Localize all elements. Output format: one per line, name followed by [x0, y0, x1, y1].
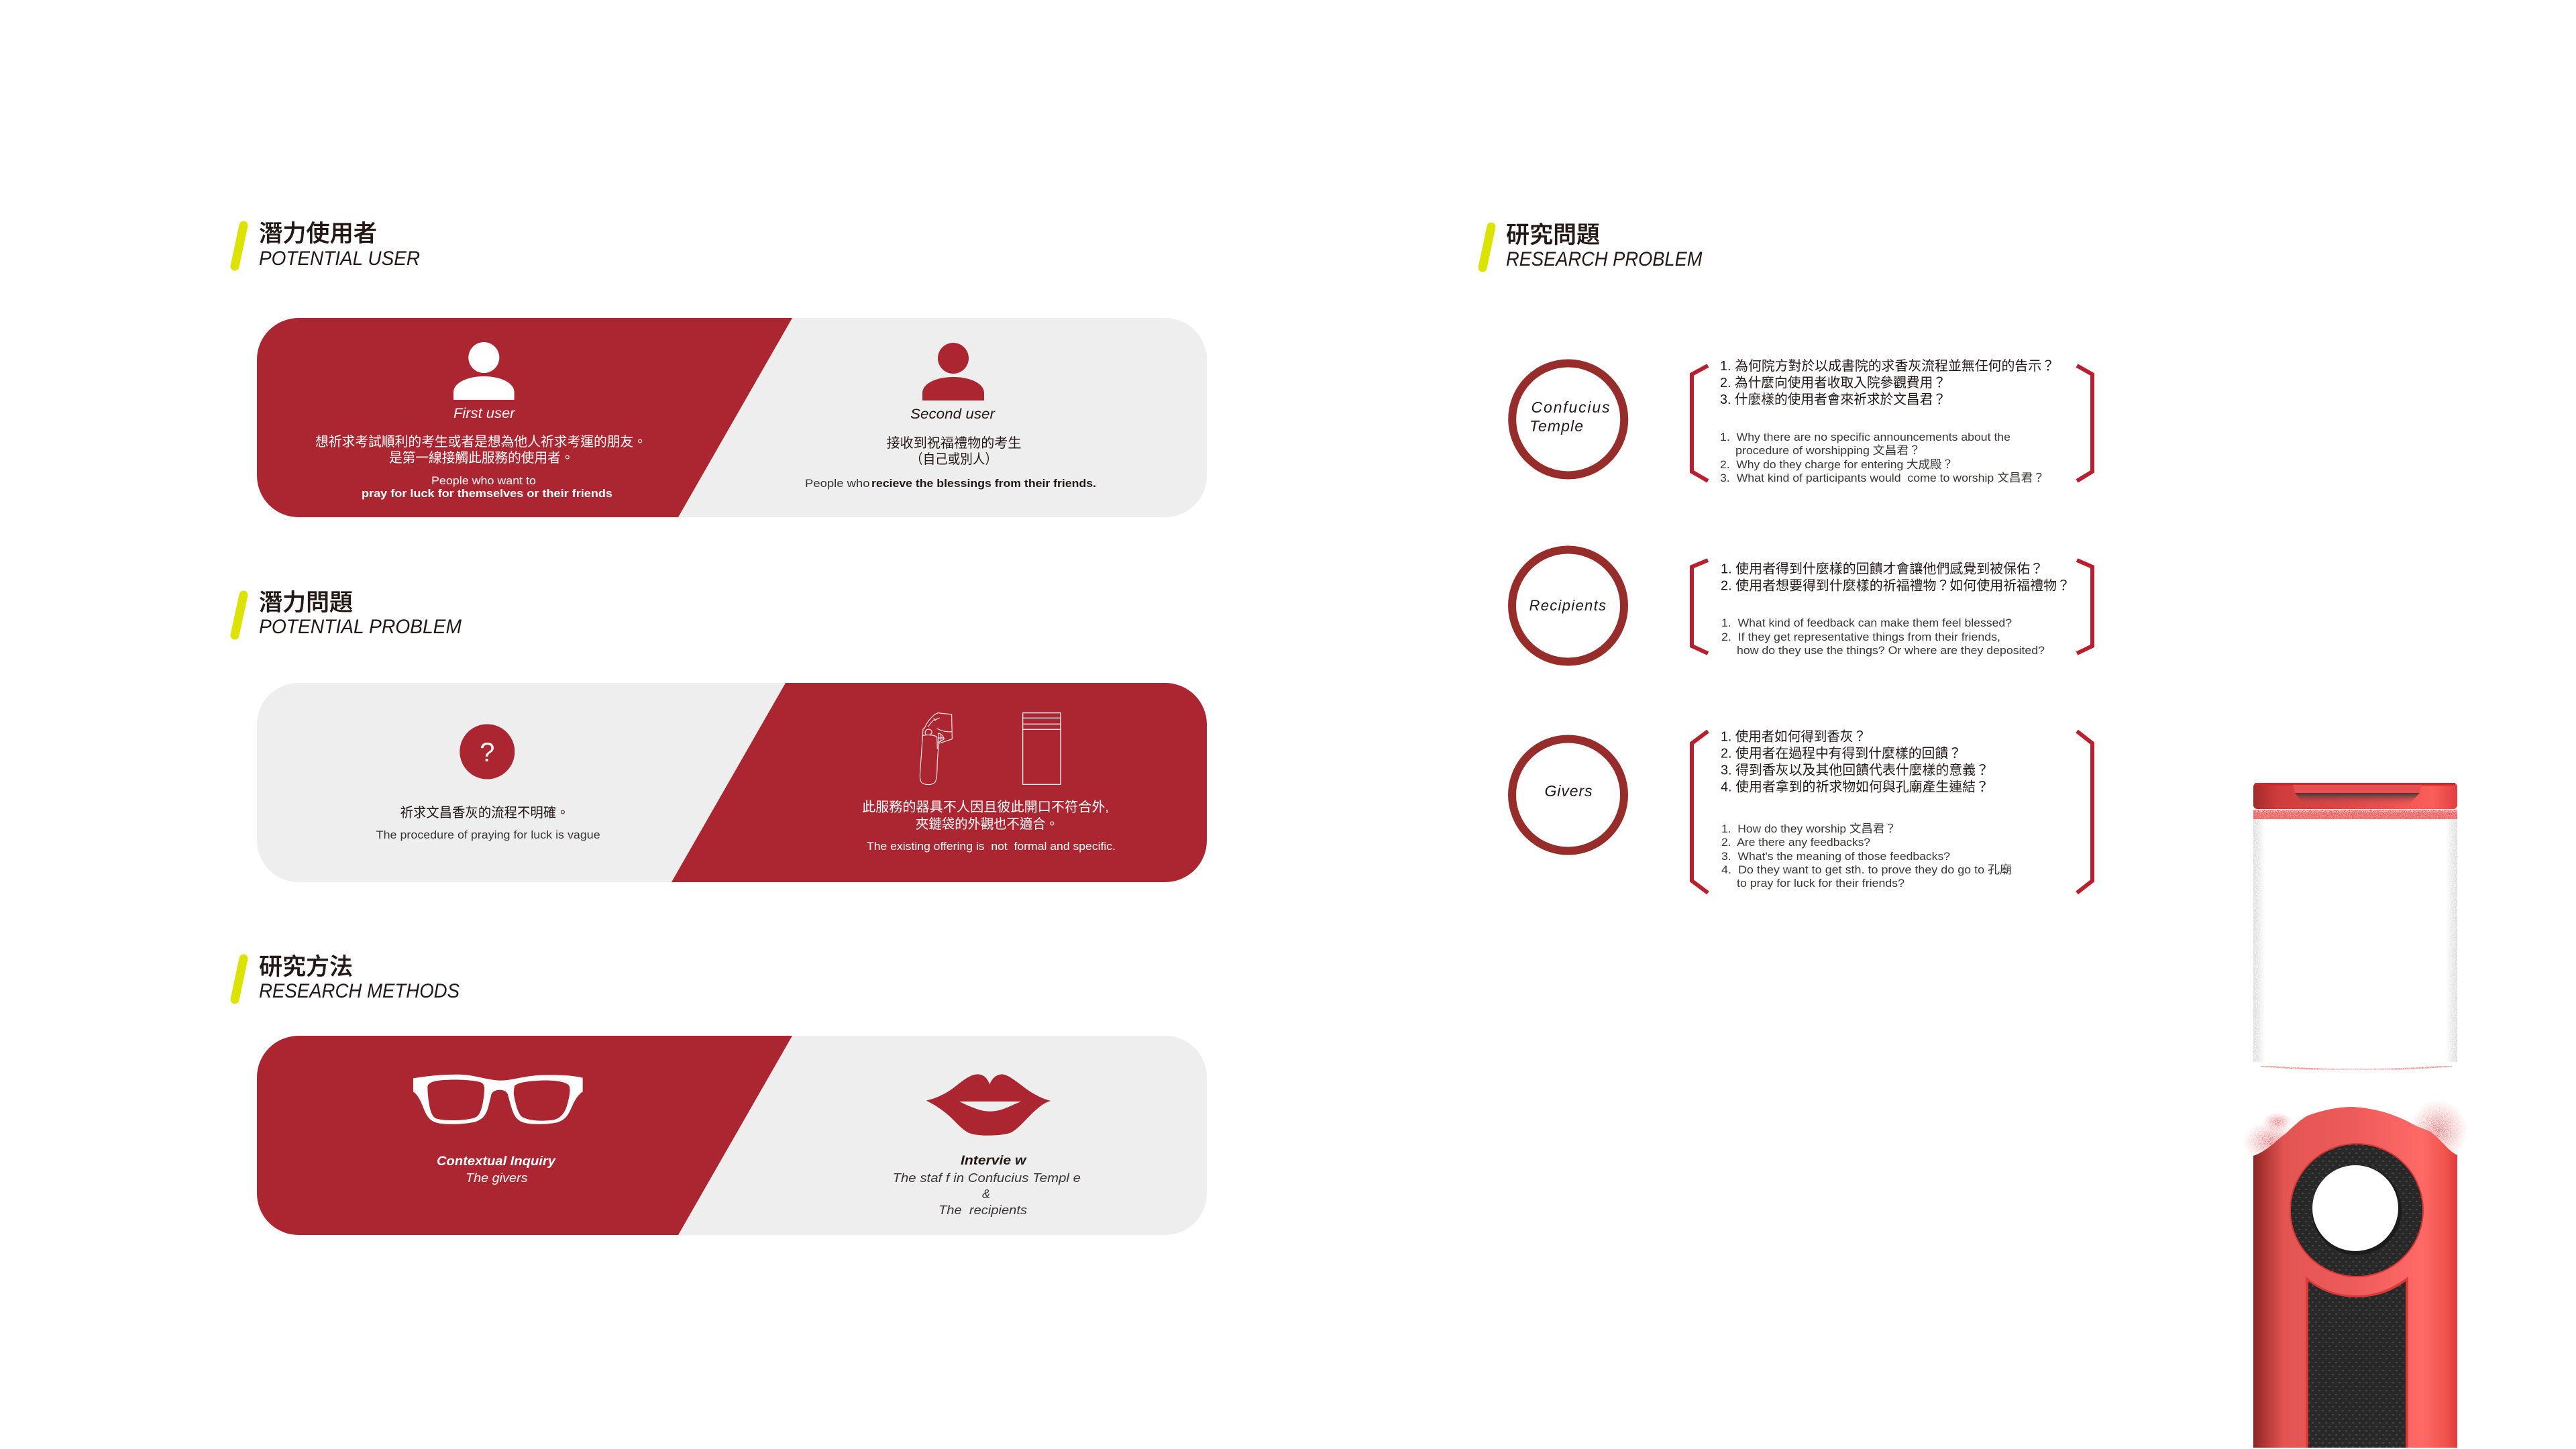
first user description: 想祈求考試順利的考生或者是想為他人祈求考運的朋友。 — [315, 434, 647, 449]
questions: Confucius Temple: 2. Why do they charge for entering 大成殿？ — [1720, 458, 1953, 471]
heading: research methods: 研究方法 — [259, 954, 353, 980]
panel: potential user — [257, 318, 1207, 517]
heading: potential user: POTENTIAL USER — [259, 248, 420, 270]
first user description: 是第一線接觸此服務的使用者。 — [389, 450, 574, 466]
heading: potential problem — [235, 590, 462, 638]
interview text: The staf f in Confucius Templ e — [892, 1171, 1081, 1185]
questions: Givers: 2. 使用者在過程中有得到什麼樣的回饋？ — [1721, 746, 1962, 761]
vague procedure text: The procedure of praying for luck is vague — [376, 828, 600, 841]
questions: Recipients: 2. If they get representative things from their friends, — [1721, 631, 2000, 643]
device fabric strip — [2306, 1277, 2408, 1448]
heading: potential user: 潛力使用者 — [259, 221, 377, 247]
icon: lips — [926, 1074, 1051, 1136]
vague procedure text — [376, 805, 600, 841]
bracket: Givers questions — [1692, 731, 2092, 893]
questions: Givers: 1. How do they worship 文昌君？ — [1721, 822, 1896, 835]
existing offering text — [862, 800, 1116, 853]
contextual inquiry text: The givers — [466, 1171, 527, 1185]
icon: zip bag outline — [1023, 713, 1061, 784]
questions: Recipients: 1. 使用者得到什麼樣的回饋才會讓他們感覺到被保佑？ — [1721, 561, 2043, 577]
circle: Givers — [1512, 739, 1624, 851]
heading: research problem — [1483, 222, 1703, 270]
questions: Confucius Temple: 3. What kind of participants would come to worship 文昌君？ — [1720, 472, 2045, 484]
questions: Confucius Temple: 2. 為什麼向使用者收取入院參觀費用？ — [1720, 375, 1946, 390]
first user description — [315, 434, 647, 500]
questions: Givers: to pray for luck for their friends? — [1737, 877, 1904, 890]
second user description: recieve the blessings from their friends. — [871, 477, 1096, 490]
questions: Givers: 2. Are there any feedbacks? — [1721, 836, 1870, 849]
first user description: People who want to — [431, 474, 536, 487]
contextual inquiry text: Contextual Inquiry — [437, 1155, 557, 1169]
icon: glasses — [413, 1075, 583, 1124]
device lid — [2253, 783, 2457, 809]
questions: Givers — [1721, 729, 2012, 890]
circle: Confucius Temple: Temple — [1529, 417, 1583, 435]
existing offering text: The existing offering is not formal and specific. — [867, 840, 1116, 853]
circle: Confucius Temple — [1512, 364, 1624, 475]
bracket: Confucius Temple questions — [1692, 366, 2092, 481]
heading: potential user — [235, 221, 420, 270]
bracket: Recipients questions — [1692, 560, 2092, 653]
questions: Givers: 4. 使用者拿到的祈求物如何與孔廟產生連結？ — [1721, 778, 1989, 794]
icon: first user — [453, 342, 515, 400]
device body — [2253, 1107, 2457, 1448]
circle: Recipients: Recipients — [1529, 597, 1606, 614]
questions: Givers: 1. 使用者如何得到香灰？ — [1721, 729, 1866, 745]
icon: offering device outline — [920, 713, 952, 785]
second user description: People who — [805, 477, 869, 490]
questions: Recipients: 1. What kind of feedback can make them feel blessed? — [1721, 616, 2012, 629]
device shoulder speckle — [2243, 1099, 2468, 1162]
heading: potential problem: POTENTIAL PROBLEM — [259, 616, 462, 638]
questions: Recipients — [1721, 561, 2070, 657]
questions: Confucius Temple: 1. 為何院方對於以成書院的求香灰流程並無任何的告示？ — [1720, 358, 2055, 374]
heading: research problem: 研究問題 — [1506, 222, 1600, 248]
second user description: （自己或別人） — [910, 451, 998, 467]
heading: research methods — [235, 954, 460, 1002]
interview text: Intervie w — [961, 1154, 1027, 1168]
questions: Confucius Temple — [1720, 358, 2055, 484]
questions: Recipients: how do they use the things? Or where are they deposited? — [1737, 644, 2045, 657]
icon: second user — [922, 343, 984, 400]
panel: research methods — [257, 1036, 1207, 1235]
questions: Confucius Temple: procedure of worshipping 文昌君？ — [1735, 444, 1921, 457]
existing offering text: 此服務的器具不人因且彼此開口不符合外, — [862, 800, 1109, 814]
vague procedure text: 祈求文昌香灰的流程不明確。 — [400, 805, 569, 820]
circle: Givers: Givers — [1544, 782, 1593, 800]
questions: Recipients: 2. 使用者想要得到什麼樣的祈福禮物？如何使用祈福禮物？ — [1721, 578, 2070, 593]
questions: Confucius Temple: 3. 什麼樣的使用者會來祈求於文昌君？ — [1720, 392, 1946, 407]
device glass jar — [2253, 810, 2457, 1069]
second user description: 接收到祝福禮物的考生 — [887, 435, 1021, 451]
second user description — [805, 435, 1096, 490]
interview text: The recipients — [938, 1203, 1027, 1217]
contextual inquiry text — [437, 1155, 557, 1185]
product: red offering device — [2243, 783, 2468, 1448]
icon: question mark — [460, 724, 515, 780]
heading: potential problem: 潛力問題 — [259, 590, 353, 616]
heading: research methods: RESEARCH METHODS — [259, 980, 460, 1002]
interview text — [892, 1154, 1081, 1217]
questions: Givers: 4. Do they want to get sth. to prove they do go to 孔廟 — [1721, 863, 2012, 876]
icon: question mark: ? — [480, 738, 494, 767]
second user label: Second user — [910, 407, 996, 422]
first user description: pray for luck for themselves or their friends — [362, 487, 612, 500]
circle: Recipients — [1512, 550, 1624, 661]
circle: Confucius Temple: Confucius — [1531, 398, 1610, 416]
device speaker ring — [2290, 1143, 2424, 1277]
first user label: First user — [453, 406, 516, 421]
questions: Confucius Temple: 1. Why there are no specific announcements about the — [1720, 431, 2010, 443]
questions: Givers: 3. 得到香灰以及其他回饋代表什麼樣的意義？ — [1721, 762, 1989, 778]
heading: research problem: RESEARCH PROBLEM — [1506, 248, 1703, 270]
interview text: & — [982, 1187, 990, 1201]
panel: potential problem — [257, 683, 1207, 882]
existing offering text: 夾鏈袋的外觀也不適合。 — [916, 816, 1059, 832]
questions: Givers: 3. What's the meaning of those feedbacks? — [1721, 850, 1950, 863]
